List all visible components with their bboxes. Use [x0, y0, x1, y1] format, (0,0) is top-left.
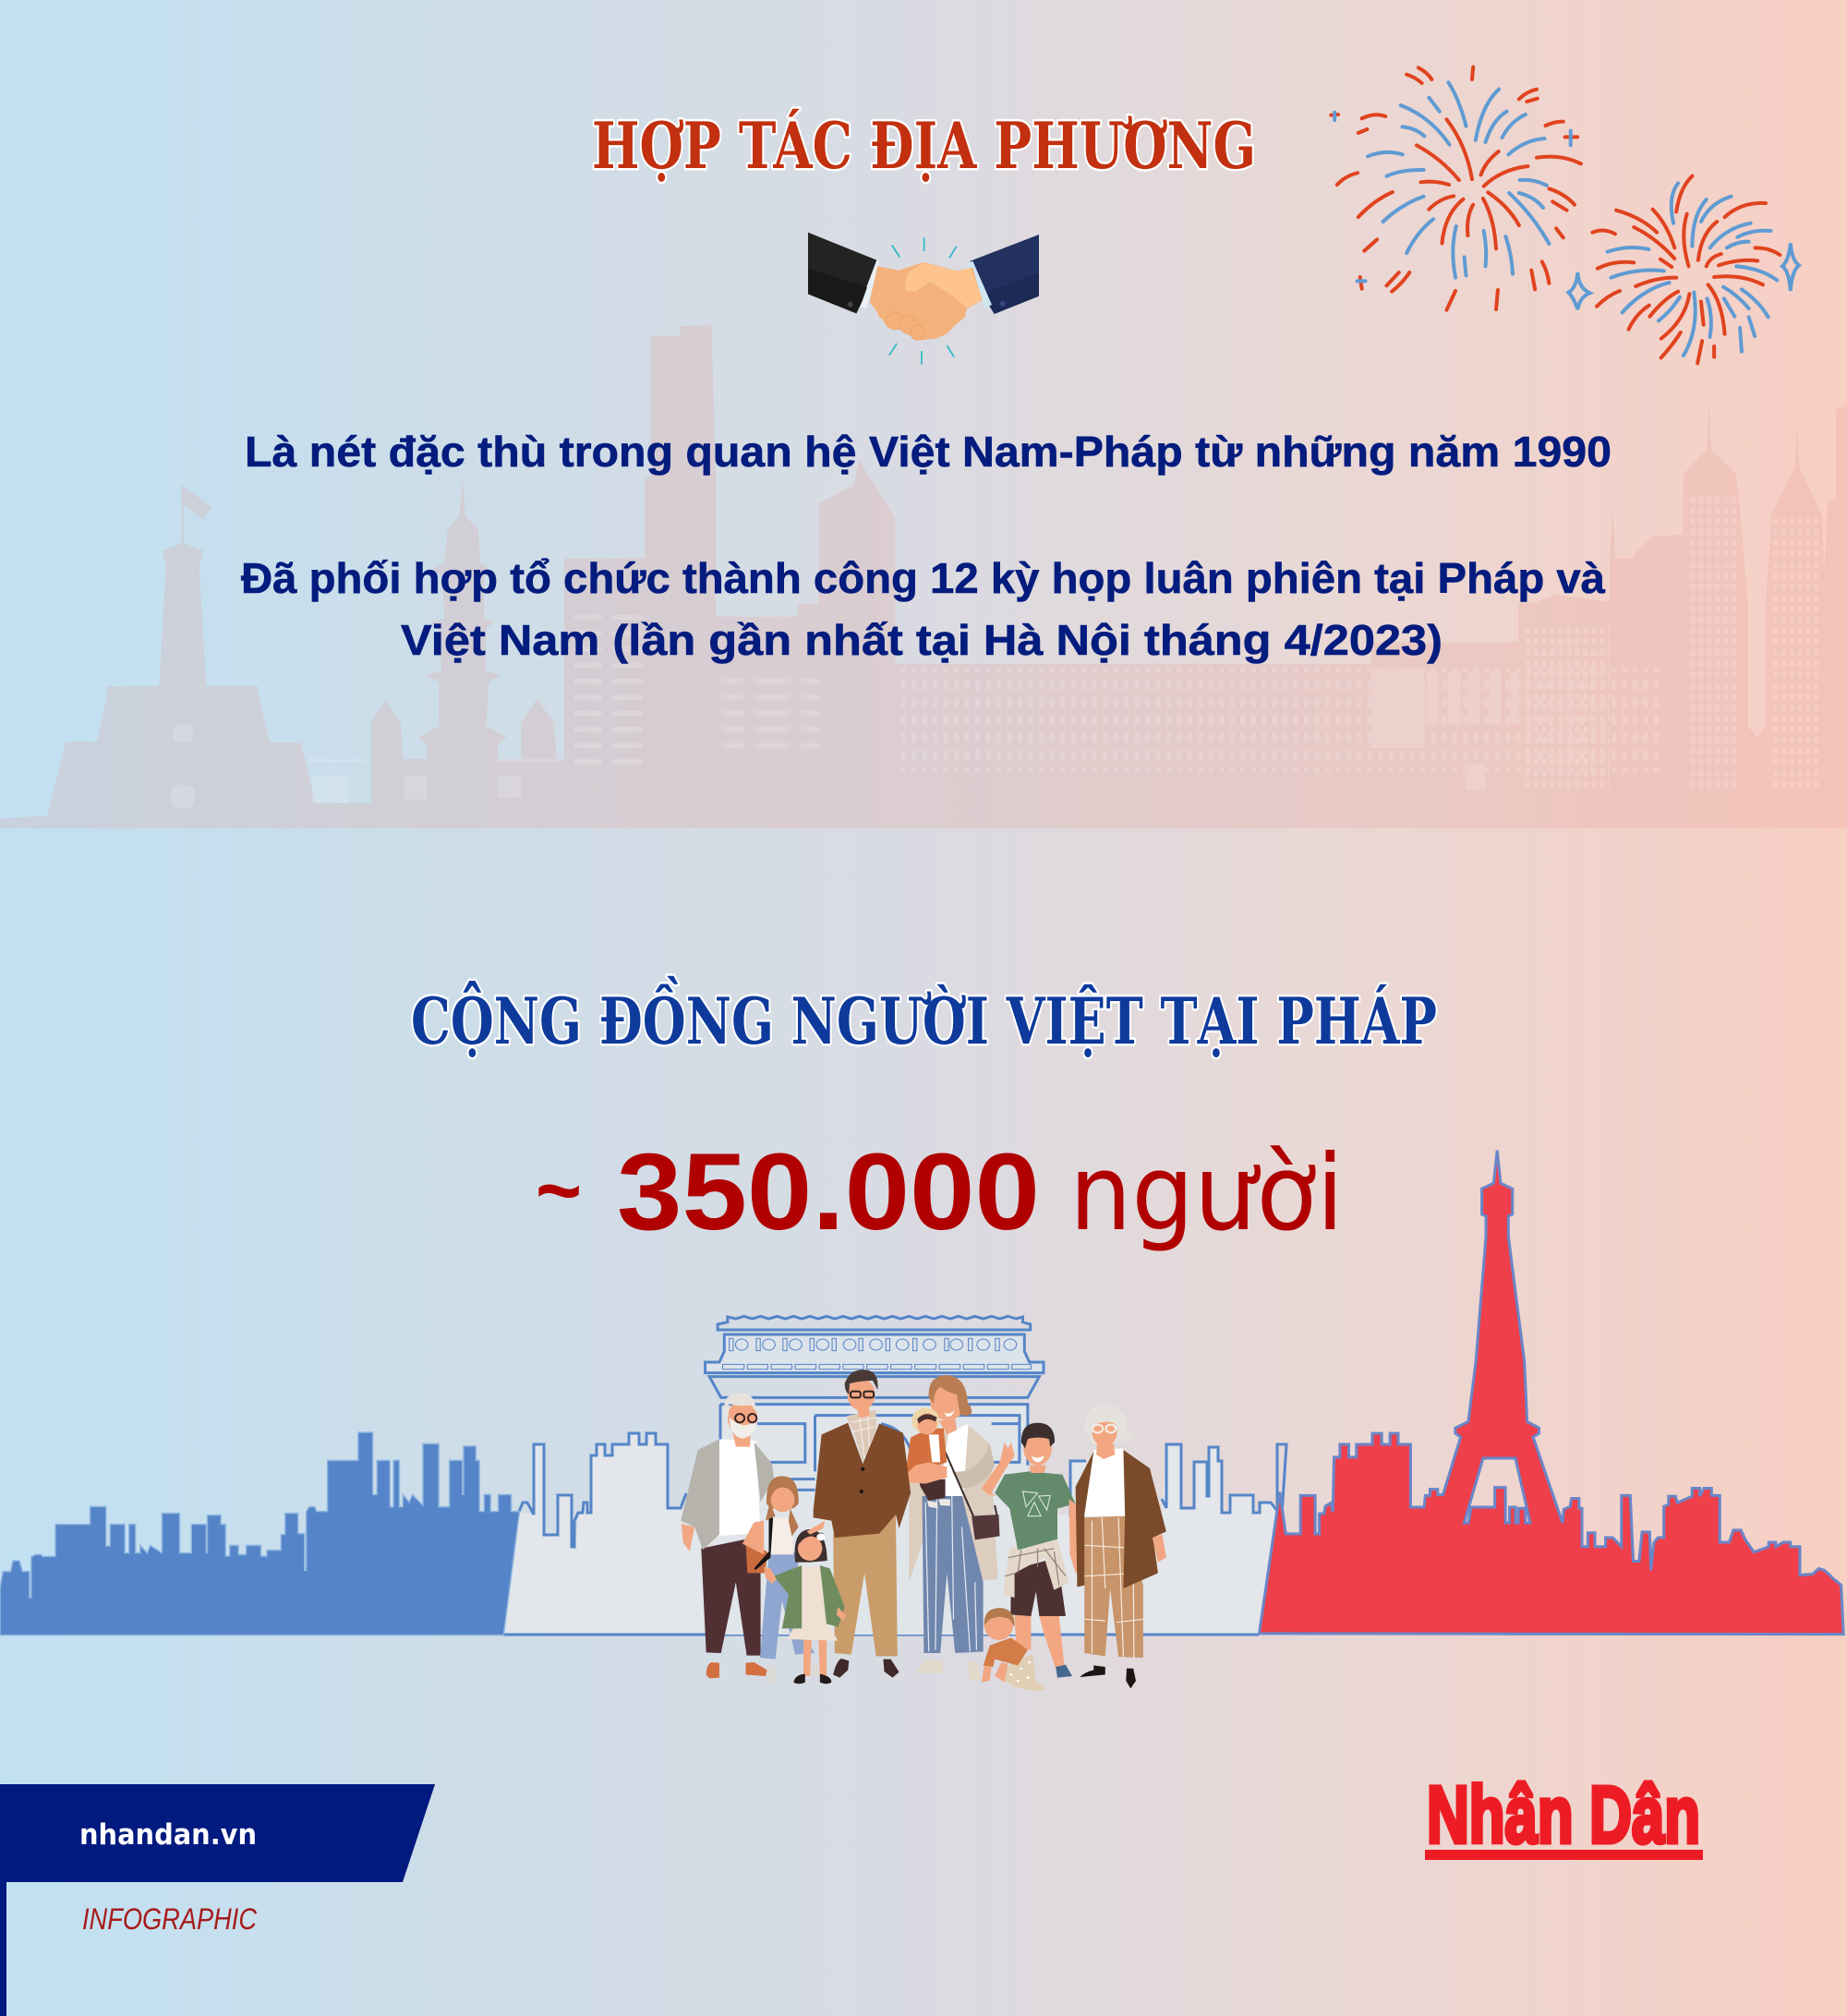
person: grandmother [1076, 1405, 1166, 1688]
person: crawling toddler [982, 1608, 1045, 1692]
skyline: red right section with Eiffel Tower [1260, 1151, 1843, 1635]
person: grandfather [681, 1393, 774, 1678]
text: line 1: Là nét đặc thù trong quan hệ Việt Nam-Pháp từ những năm 1990 [245, 428, 1612, 476]
person: girl in overalls [742, 1476, 820, 1683]
skyline window highlights [171, 496, 1818, 808]
text block: partnership facts [241, 428, 1612, 664]
footer: nhandan.vn banner [0, 1784, 435, 2016]
big number: 350.000 người [536, 1131, 1344, 1254]
big number: 350.000 người: 350.000 [617, 1131, 1040, 1253]
skyline: centre outline [519, 1433, 686, 1547]
icon: Arc de Triomphe outline [706, 1316, 1044, 1635]
person: man with glasses [814, 1370, 911, 1678]
icon: handshake [808, 233, 1039, 364]
fireworks [1331, 67, 1799, 363]
text: line 3: Việt Nam (lần gần nhất tại Hà Nội tháng 4/2023) [401, 616, 1443, 664]
skyline: grey centre section [503, 1433, 1280, 1635]
big number: 350.000 người: ~ [536, 1143, 582, 1237]
title: Hợp tác địa phương: HỢP TÁC ĐỊA PHƯƠNG [592, 108, 1256, 184]
heading: Cộng đồng người Việt tại Pháp: CỘNG ĐỒNG NGƯỜI VIỆT TẠI PHÁP [411, 976, 1437, 1059]
footer: INFOGRAPHIC label: INFOGRAPHIC [82, 1902, 258, 1936]
person: baby and mother back [902, 1375, 999, 1681]
faded city skyline backdrop [0, 324, 1847, 828]
text: line 2: Đã phối hợp tổ chức thành công 12 kỳ họp luân phiên tại Pháp và [241, 554, 1605, 602]
illustration: family group [681, 1370, 1166, 1692]
firework: blue sparks [1334, 82, 1799, 356]
skyline: blue left section [0, 1432, 520, 1636]
person: teenage boy [982, 1423, 1081, 1678]
text: nhandan.vn: nhandan.vn [79, 1818, 257, 1852]
skyline: baseline [503, 1633, 1259, 1636]
big number: 350.000 người: người [1069, 1132, 1344, 1254]
logo: Nhân Dân: Nhân Dân [1427, 1770, 1700, 1860]
person: small girl in green [764, 1521, 846, 1684]
firework: red sparks [1331, 67, 1780, 363]
